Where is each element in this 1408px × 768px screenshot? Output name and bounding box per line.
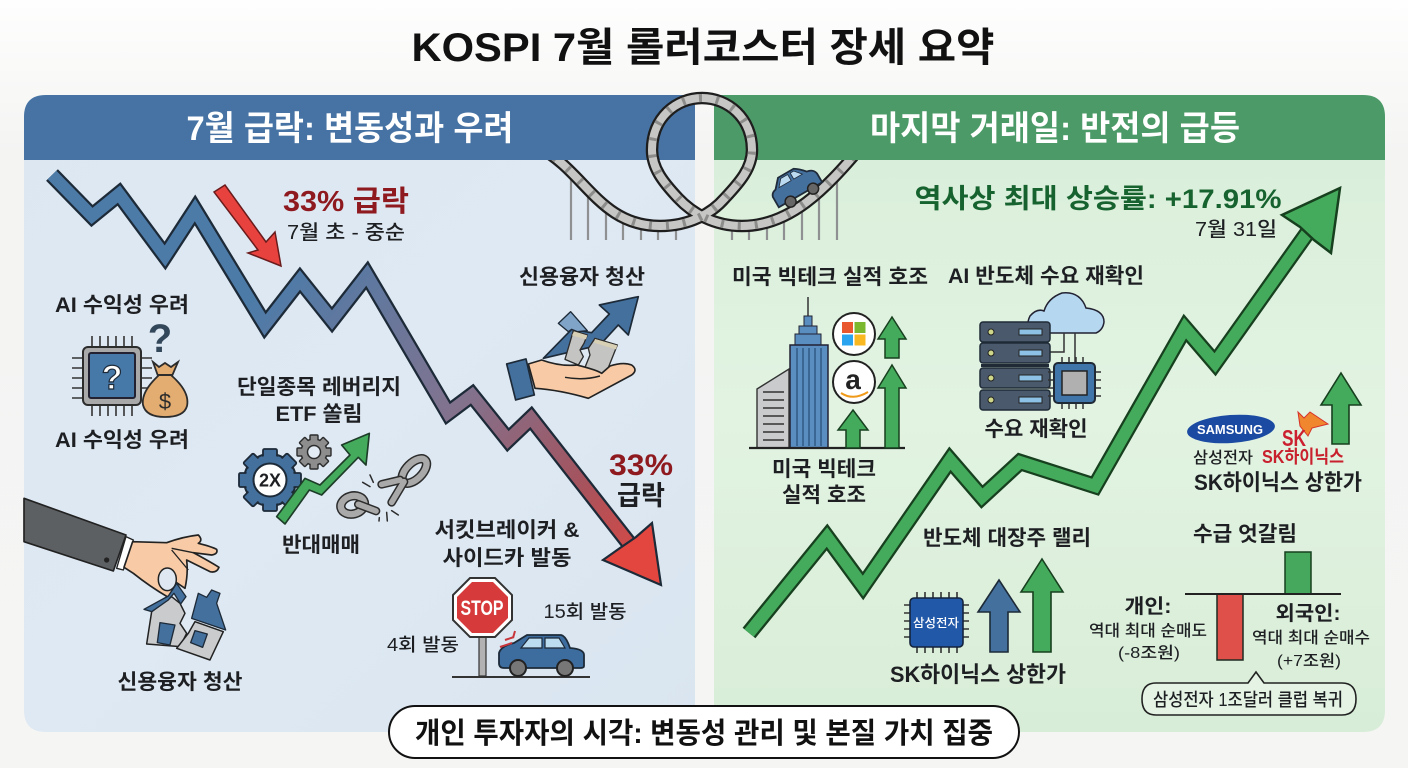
icon: 2X gears: 2X: [259, 470, 281, 490]
title: KOSPI 7월 롤러코스터 장세 요약: [412, 26, 994, 70]
callout: record gain: 역사상 최대 상승률: +17.91%: [914, 184, 1282, 214]
icon: SK logo: [1282, 412, 1328, 451]
chart: rising line with arrow: [749, 188, 1340, 633]
text block: foreign investors: (+7조원): [1277, 652, 1341, 670]
callout: 33% plunge near arrow: [609, 449, 673, 511]
text block: retail investors: 역대 최대 순매도: [1089, 622, 1207, 640]
label: AI semiconductor demand top: AI 반도체 수요 재확인: [948, 265, 1144, 288]
icon: blue rally arrow: [978, 580, 1020, 652]
label: circuit breaker and sidecar: 서킷브레이커 &: [434, 519, 580, 542]
callout pill: retail investor view: 개인 투자자의 시각: 변동성 관리 및 본질 가치 집중: [415, 717, 993, 750]
label: leveraged ETF: ETF 쏠림: [276, 403, 362, 426]
icon: Samsung chip: 삼성전자: [913, 616, 959, 630]
label: SK Hynix red: SK하이닉스: [1262, 447, 1344, 467]
label: credit liquidation bottom: 신용융자 청산: [118, 671, 242, 694]
icon: SK logo: SK: [1282, 425, 1306, 451]
callout: 33% plunge near arrow: 급락: [617, 481, 665, 511]
icon: cloud server and chip: [980, 293, 1104, 410]
callout pill: retail investor view: [389, 706, 1019, 758]
icon: Microsoft logo: [833, 313, 875, 355]
panel: last trading day background: [714, 95, 1385, 732]
text block: retail investors: (-8조원): [1118, 644, 1180, 662]
label: US big tech bottom: [772, 458, 876, 507]
icon: Samsung logo: [1186, 412, 1276, 446]
label: demand reconfirmed: 수요 재확인: [984, 418, 1088, 441]
label: credit liquidation top: 신용융자 청산: [519, 266, 645, 289]
icon: 2X gears: [239, 435, 331, 511]
heading bar: July plunge: 7월 급락: 변동성과 우려: [186, 110, 514, 148]
label: leveraged ETF: 단일종목 레버리지: [237, 376, 401, 399]
icon: Samsung chip: [904, 592, 969, 653]
text block: retail investors: [1089, 595, 1207, 662]
icon: small red down arrow: [214, 185, 281, 266]
callout: record gain: [914, 184, 1282, 241]
label: US big tech top: 미국 빅테크 실적 호조: [732, 266, 928, 289]
icon: SK Hynix up arrow: [1321, 373, 1361, 444]
callout: 33% plunge: 33% 급락: [283, 185, 409, 218]
chart: falling line with arrow: [52, 175, 661, 585]
label: SK Hynix limit up right: SK하이닉스 상한가: [1194, 470, 1362, 495]
text block: retail investors: 개인:: [1124, 595, 1172, 618]
label: AI profitability concern bottom: AI 수익성 우려: [55, 429, 189, 452]
icon: skyscrapers: [749, 297, 905, 448]
label: margin selling: 반대매매: [282, 534, 360, 557]
heading bar: last trading day: [714, 95, 1385, 160]
icon: big tech up arrows: [838, 317, 906, 448]
icon: hand in suit holding broken house: [24, 498, 226, 660]
bar chart: retail vs foreign: [1185, 552, 1341, 660]
text block: foreign investors: [1252, 602, 1370, 670]
panel: July plunge background: [24, 95, 695, 732]
heading bar: last trading day: 마지막 거래일: 반전의 급등: [870, 110, 1240, 148]
label: US big tech bottom: 미국 빅테크: [772, 458, 876, 481]
icon: AI chip with question and money bag: $: [159, 389, 171, 414]
text block: foreign investors: 외국인:: [1276, 602, 1340, 625]
callout: Samsung 1 trillion club: 삼성전자 1조달러 클럽 복귀: [1153, 690, 1343, 710]
callout: 33% plunge: 7월 초 - 중순: [287, 221, 405, 244]
text block: foreign investors: 역대 최대 순매수: [1252, 629, 1370, 647]
label: circuit breaker and sidecar: [434, 519, 580, 570]
icon: broken chain: [339, 454, 431, 521]
icon: AI chip with question and money bag: ?: [102, 359, 122, 397]
label: US big tech bottom: 실적 호조: [782, 484, 866, 507]
icon: AI chip with question and money bag: ?: [148, 317, 172, 361]
icon: stop sign: [452, 578, 590, 677]
label: AI profitability concern top: AI 수익성 우려: [55, 294, 189, 317]
icon: blue car: [499, 631, 584, 676]
label: supply demand divergence: 수급 엇갈림: [1193, 523, 1297, 546]
callout: 33% plunge near arrow: 33%: [609, 449, 673, 482]
icon: green rally arrow: [1021, 559, 1063, 652]
callout: 33% plunge: [283, 185, 409, 244]
label: 4 times triggered: 4회 발동: [387, 635, 459, 655]
icon: AI chip with question and money bag: [72, 317, 187, 417]
icon: Samsung logo: SAMSUNG: [1197, 422, 1263, 437]
label: SK Hynix limit up bottom: SK하이닉스 상한가: [890, 662, 1066, 687]
label: leveraged ETF: [237, 376, 401, 426]
rollercoaster track with supports: [540, 98, 862, 240]
label: semiconductor rally: 반도체 대장주 랠리: [923, 527, 1091, 550]
icon: Amazon logo: [833, 361, 875, 403]
label: Samsung Electronics: 삼성전자: [1193, 449, 1253, 467]
icon: green zigzag arrow: [277, 433, 369, 524]
icon: car on coaster: [766, 160, 825, 213]
label: 15 times triggered: 15회 발동: [544, 601, 626, 623]
heading bar: July plunge: [24, 95, 695, 160]
icon: hand with torn paper and arrow: [507, 297, 638, 400]
label: circuit breaker and sidecar: 사이드카 발동: [442, 547, 572, 570]
icon: stop sign: STOP: [460, 597, 504, 620]
icon: Amazon logo: a: [845, 364, 861, 395]
callout: record gain: 7월 31일: [1195, 218, 1277, 241]
callout: Samsung 1 trillion club: [1142, 672, 1356, 715]
